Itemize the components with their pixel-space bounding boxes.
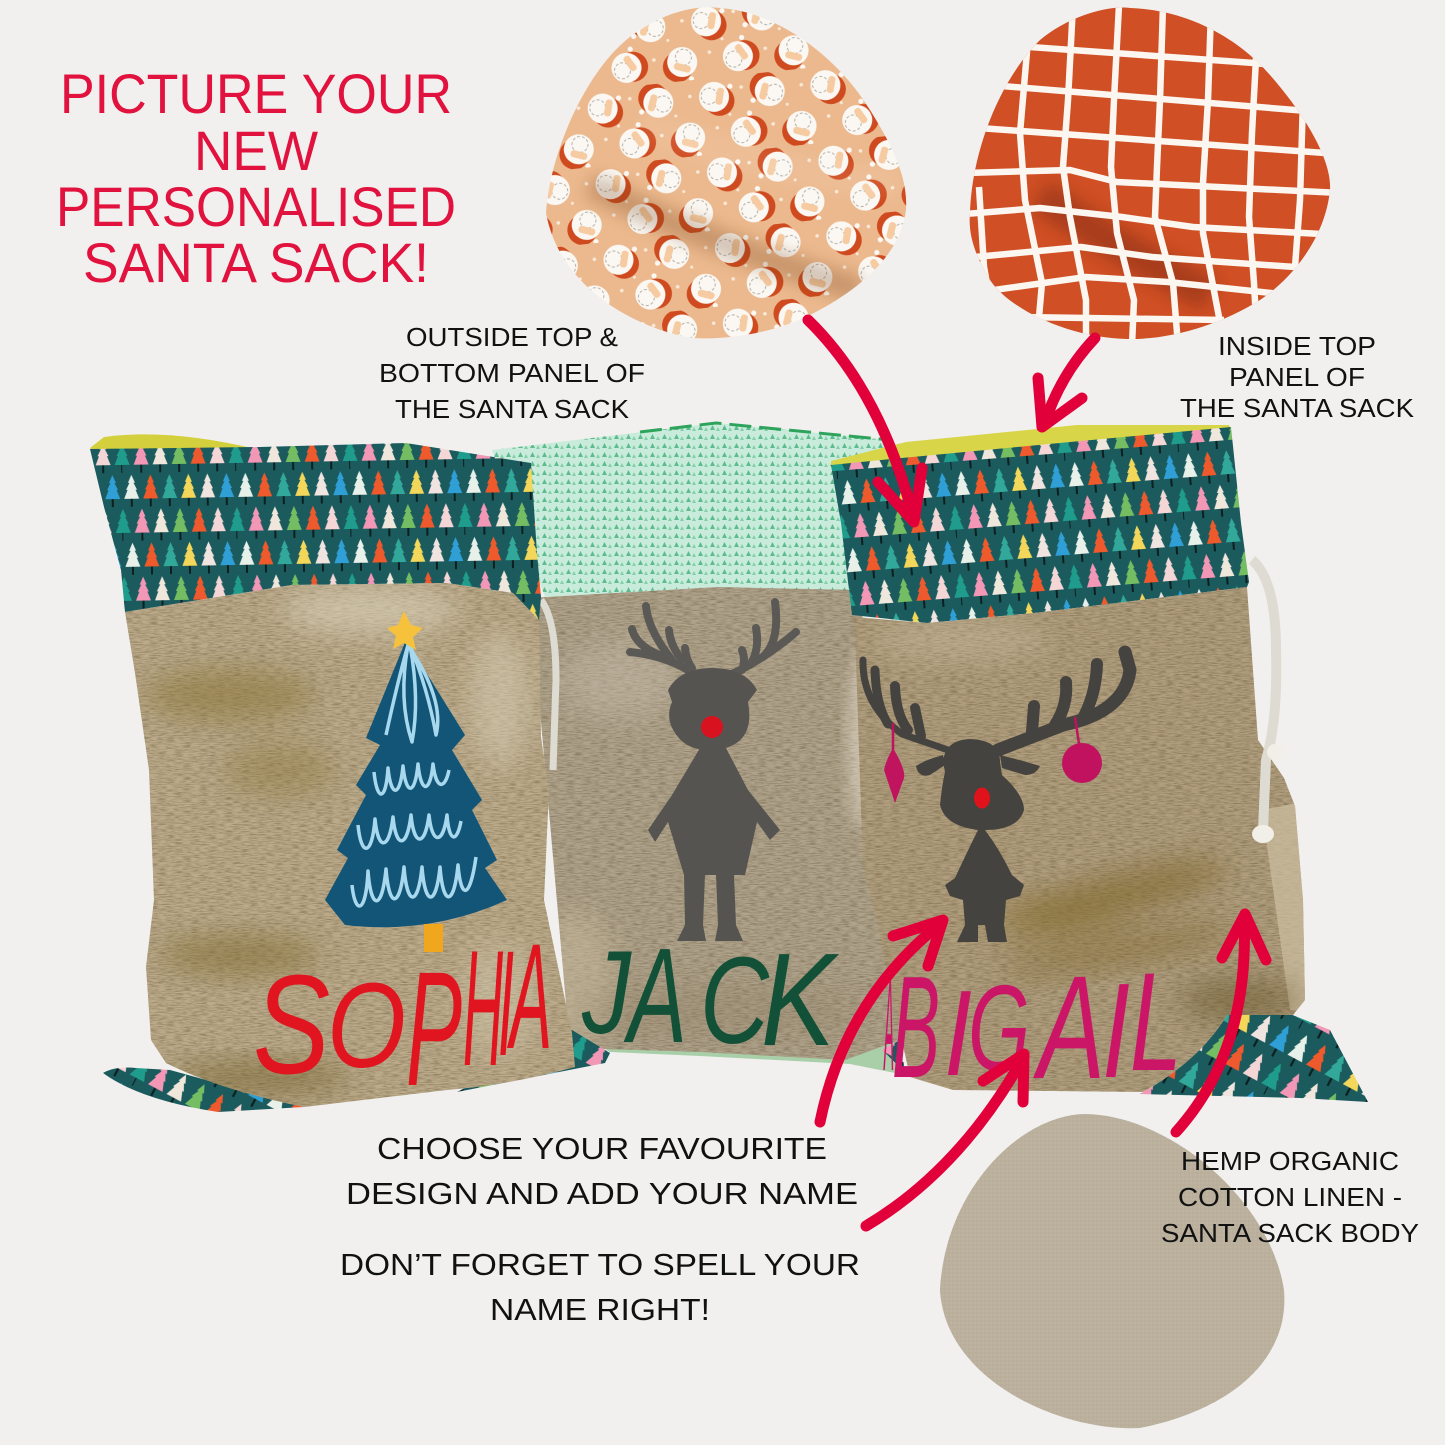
label: choose design: DESIGN AND ADD YOUR NAME: [346, 1176, 858, 1211]
nose: Jack: [701, 716, 723, 738]
name: Jack: [581, 920, 839, 1073]
arrow: linen to body: [1176, 914, 1266, 1132]
name: Jack: A: [623, 920, 687, 1071]
ornaments: [884, 717, 1102, 803]
label: outside panel: THE SANTA SACK: [395, 396, 629, 424]
reindeer: Jack: [630, 602, 796, 941]
label: linen body: COTTON LINEN -: [1178, 1184, 1402, 1212]
title: PERSONALISED: [56, 175, 456, 238]
rope knots: [1252, 744, 1283, 843]
sack: Abigail: [831, 425, 1368, 1110]
name: Abigail: A: [1033, 946, 1105, 1110]
name: Abigail: I: [944, 965, 972, 1101]
arrow: design text to reindeer: [820, 920, 943, 1122]
label: spelling reminder: DON’T FORGET TO SPELL YOUR: [340, 1247, 860, 1282]
label: inside panel: INSIDE TOP: [1218, 333, 1376, 361]
name: Abigail: B: [892, 946, 940, 1108]
label: inside panel: PANEL OF: [1229, 364, 1365, 392]
name: Jack: C: [700, 933, 770, 1070]
name: Sophia: S: [253, 945, 330, 1103]
label: linen body: HEMP ORGANIC: [1181, 1148, 1399, 1176]
label: choose design: CHOOSE YOUR FAVOURITE: [377, 1131, 827, 1166]
swatch: grid fabric: [960, 0, 1340, 345]
label: spelling reminder: NAME RIGHT!: [490, 1292, 710, 1327]
sack: Sophia: A: [507, 912, 552, 1080]
label: choose design: [346, 1131, 858, 1211]
swatch: linen body: [940, 1114, 1284, 1428]
swatch: santa fabric: [540, 0, 915, 345]
label: linen body: SANTA SACK BODY: [1161, 1220, 1419, 1248]
title: PICTURE YOUR: [60, 62, 452, 125]
title: [56, 62, 456, 294]
nose: Abigail: [974, 788, 990, 808]
arrow: santa fabric to band: [808, 320, 922, 522]
label: outside panel: BOTTOM PANEL OF: [379, 360, 645, 388]
name: Abigail: G: [968, 960, 1030, 1096]
label: outside panel: OUTSIDE TOP &: [406, 324, 618, 352]
name: Sophia: I: [498, 919, 514, 1087]
label: outside panel: [379, 324, 645, 424]
name: Jack: J: [581, 927, 632, 1059]
label: spelling reminder: [340, 1247, 860, 1327]
name: Sophia: H: [463, 916, 503, 1100]
name: Abigail: L: [1130, 943, 1182, 1100]
name: Abigail: A: [883, 952, 894, 1098]
tree: [325, 611, 507, 952]
name: Jack: K: [761, 926, 839, 1073]
name: Abigail: [883, 943, 1182, 1110]
label: inside panel: [1180, 333, 1414, 423]
arrow: spelling text to name: [866, 1054, 1024, 1226]
sack: Sophia: [90, 434, 610, 1120]
drawstring: right: [1252, 560, 1276, 830]
name: Sophia: [253, 912, 552, 1120]
name: Sophia: O: [327, 957, 406, 1093]
title: SANTA SACK!: [83, 231, 429, 294]
drawstring: left: [541, 600, 556, 770]
reindeer: Abigail: [863, 652, 1130, 942]
name: Abigail: I: [1102, 955, 1130, 1106]
sack: Jack: [492, 423, 910, 1075]
arrow: grid fabric to lining: [1038, 338, 1095, 427]
name: Sophia: P: [406, 937, 462, 1120]
title: NEW: [194, 119, 318, 182]
label: inside panel: THE SANTA SACK: [1180, 395, 1414, 423]
label: linen body: [1161, 1148, 1419, 1248]
